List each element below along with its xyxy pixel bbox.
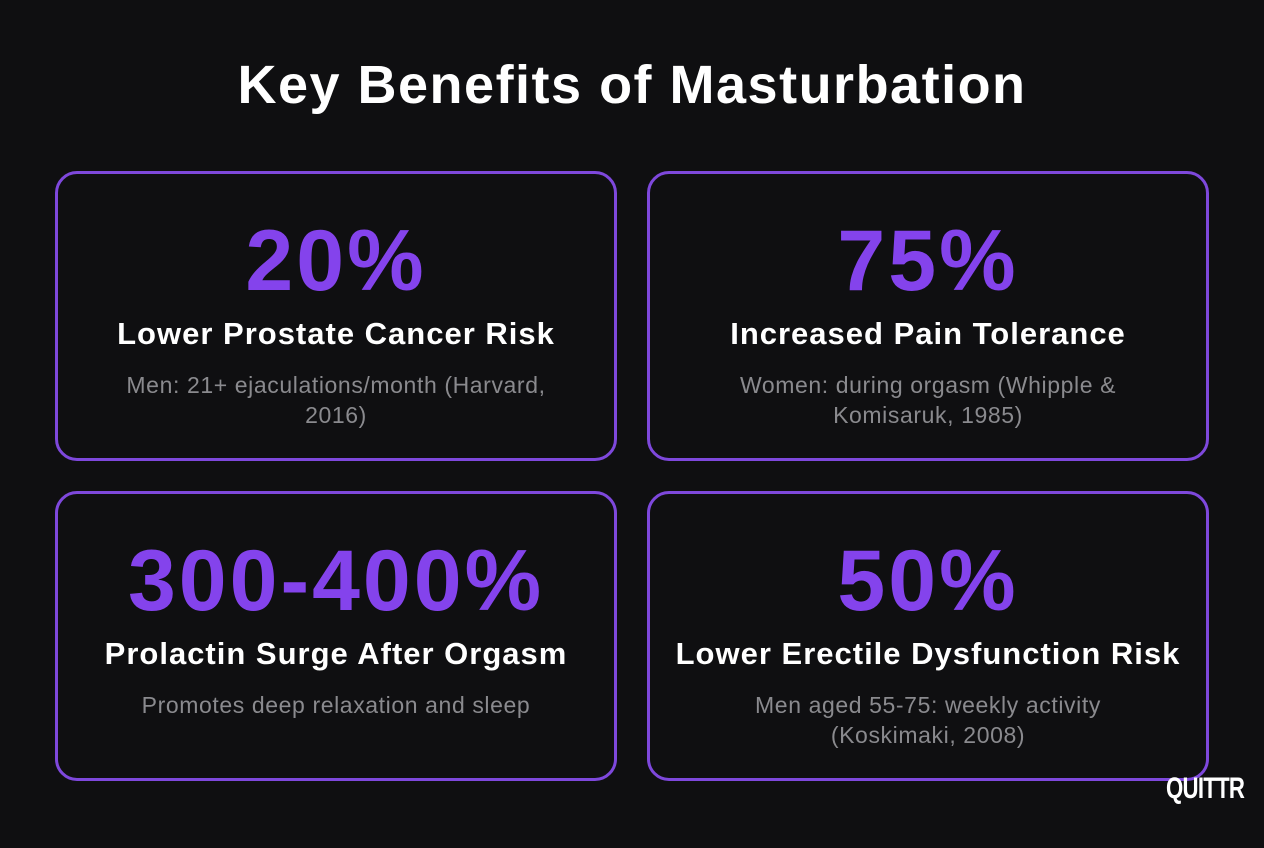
subtext: Men: 21+ ejaculations/month (Harvard, 2016) (126, 372, 546, 428)
heading: Increased Pain Tolerance (730, 316, 1126, 351)
subtext: Promotes deep relaxation and sleep (142, 692, 530, 718)
stat number: 300-400% (128, 533, 544, 629)
stat number: 75% (837, 213, 1019, 309)
subtext: Men aged 55-75: weekly activity (Koskimaki, 2008) (755, 692, 1101, 748)
subtext: Women: during orgasm (Whipple & Komisaruk, 1985) (740, 372, 1116, 428)
logo: QUITTR (1166, 772, 1244, 805)
panel: prolactin (55, 491, 617, 781)
stat number: 20% (245, 213, 427, 309)
heading: Prolactin Surge After Orgasm (105, 636, 567, 671)
panel: prostate (55, 171, 617, 461)
stat number: 50% (837, 533, 1019, 629)
heading: Lower Prostate Cancer Risk (117, 316, 555, 351)
panel: erectile (647, 491, 1209, 781)
title: Key Benefits of Masturbation (237, 55, 1027, 115)
panel: pain tolerance (647, 171, 1209, 461)
heading: Lower Erectile Dysfunction Risk (676, 636, 1180, 671)
